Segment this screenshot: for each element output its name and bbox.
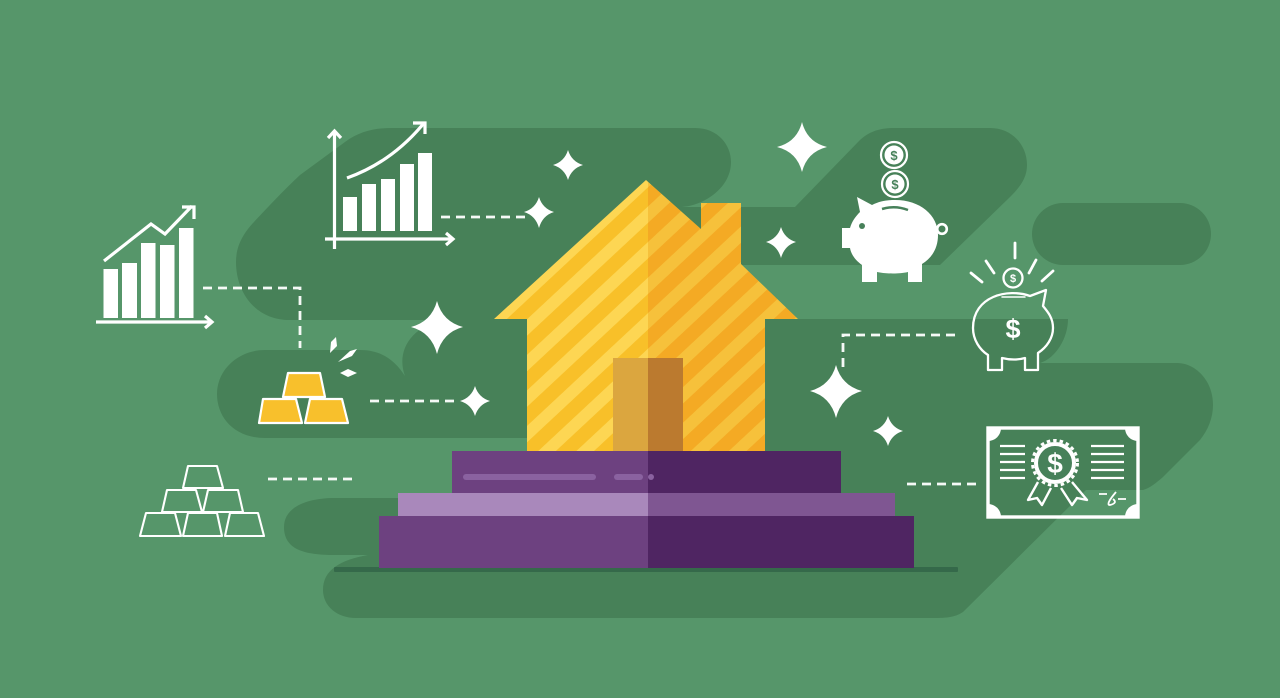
dashed connectors: [203, 217, 976, 484]
coins: [881, 142, 908, 197]
infographic canvas: [96, 121, 1213, 618]
icon: outlined piggy bank: $: [1005, 314, 1021, 344]
sparkles: [411, 122, 903, 446]
background blobs: [217, 128, 1213, 618]
icon: gold bars: [259, 337, 357, 423]
house: [490, 175, 803, 455]
icon: outlined piggy bank: [971, 243, 1053, 370]
icon: outlined piggy bank: $: [1010, 273, 1016, 285]
seal rosette: $: [1047, 448, 1063, 479]
house door: [613, 358, 683, 452]
icon: bar chart with zigzag trend: [96, 206, 212, 328]
icon: bond certificate: [988, 428, 1138, 517]
coins: $: [891, 177, 899, 192]
icon: solid piggy bank with coins: [842, 142, 947, 282]
coins: $: [890, 148, 898, 163]
pig body: [842, 197, 938, 282]
purple stepped pedestal: [334, 451, 958, 572]
icon: outlined silver bars: [140, 466, 264, 536]
seal rosette: [1028, 440, 1087, 505]
icon: bar chart with curved growth arrow: [325, 123, 453, 249]
